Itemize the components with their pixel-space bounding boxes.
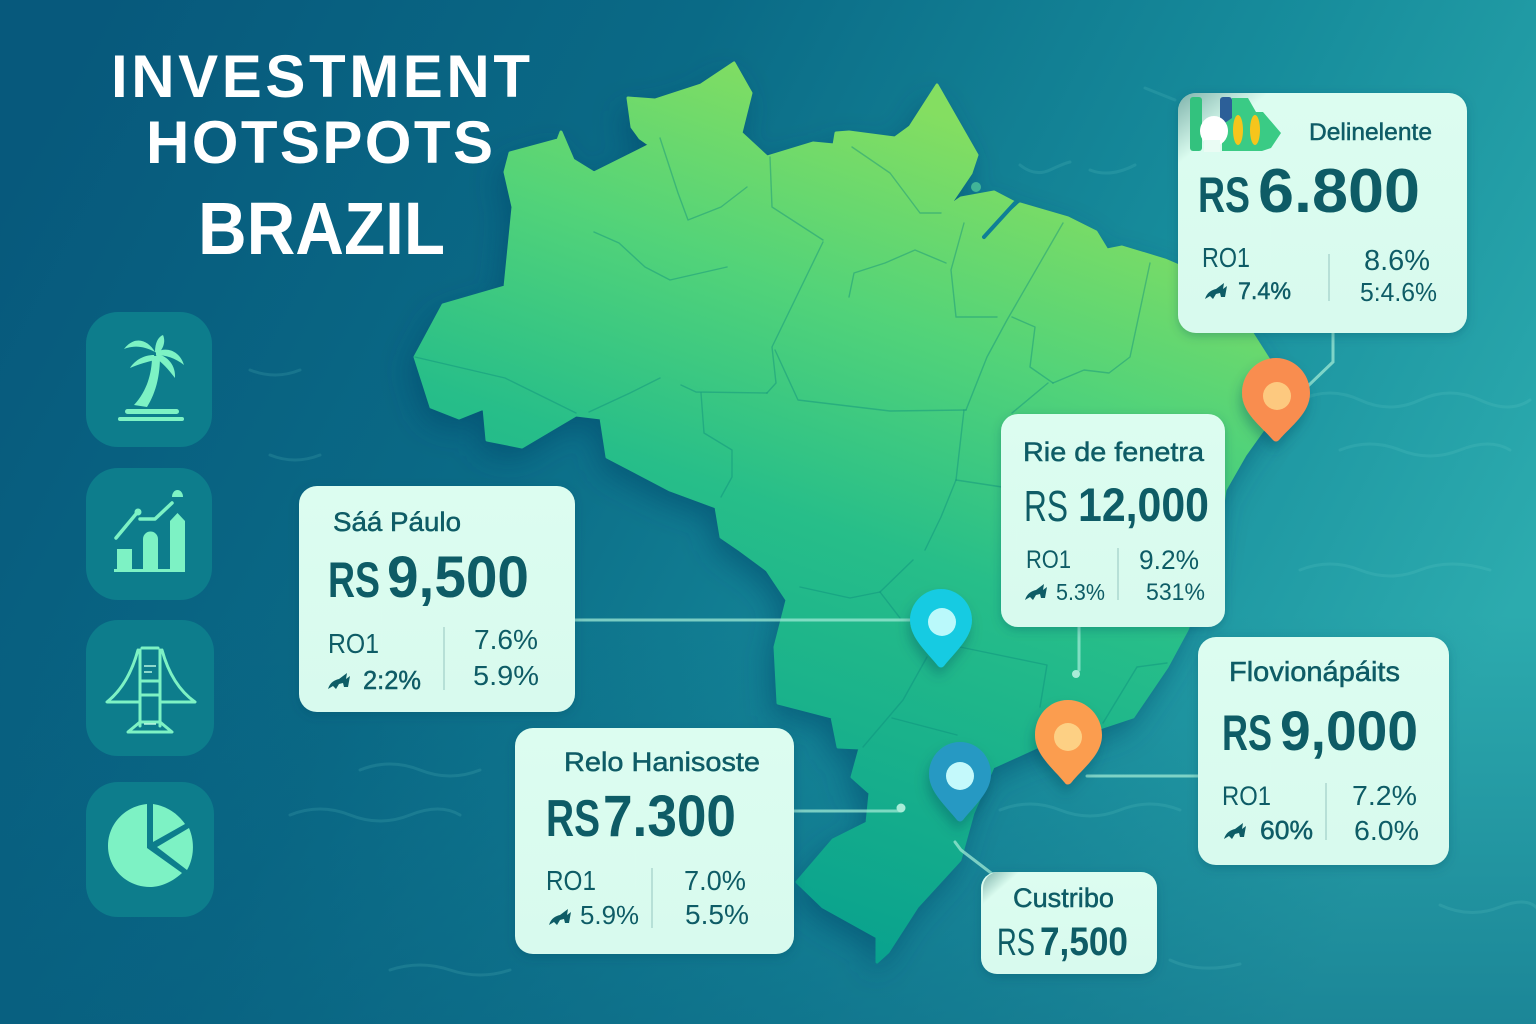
card: Delinelente [1178, 93, 1467, 333]
card: Flovionápáits: RS [1222, 705, 1272, 761]
card: Flovionápáits: 9,000 [1280, 699, 1418, 762]
card: Sáá Páulo: 7.6% [474, 624, 538, 655]
water wave decorations [250, 88, 1536, 975]
card: Sáá Páulo: RS [328, 552, 380, 608]
card: Rie de fenetra: RS [1024, 482, 1068, 531]
title: BRAZIL [198, 187, 445, 270]
card: Delinelente: 7.4% [1238, 278, 1291, 305]
icon: palm tree [86, 312, 212, 447]
card: Rie de fenetra: 531% [1146, 579, 1205, 606]
card: Rie de fenetra: RO1 [1026, 546, 1071, 574]
card: Rie de fenetra: 9.2% [1139, 545, 1199, 575]
pin: orange south-east [1035, 700, 1102, 784]
card: Sáá Páulo: 5.9% [473, 660, 539, 691]
card: Flovionápáits: Flovionápáits [1229, 656, 1400, 687]
card: Delinelente: RO1 [1202, 242, 1250, 273]
card: Relo Hanisoste [515, 728, 794, 954]
card: Relo Hanisoste: 5.5% [685, 899, 749, 930]
card: Delinelente: 5:4.6% [1360, 277, 1437, 307]
map of Brazil [415, 63, 1285, 962]
card: Sáá Páulo: Sáá Páulo [333, 507, 461, 537]
icon: rising bar chart [86, 468, 212, 600]
card: Flovionápáits: 7.2% [1352, 780, 1417, 811]
card: Sáá Páulo: 2:2% [363, 665, 421, 695]
card: Flovionápáits: 60% [1260, 815, 1313, 845]
card: Delinelente: Delinelente [1309, 119, 1432, 146]
card: Sáá Páulo: 9,500 [387, 545, 529, 610]
card: Delinelente: 6.800 [1258, 157, 1420, 226]
card: Custribo: RS [997, 922, 1035, 964]
icon: pie chart [86, 782, 214, 917]
title: HOTSPOTS [146, 109, 493, 176]
card: Flovionápáits: 6.0% [1354, 815, 1419, 846]
map shadow [409, 75, 1279, 974]
state borders [415, 138, 1167, 747]
card: Delinelente: RS [1198, 167, 1250, 223]
card: Custribo: Custribo [1013, 883, 1114, 913]
card: Custribo [981, 872, 1157, 974]
card: Flovionápáits [1198, 637, 1449, 865]
card: Custribo: 7,500 [1040, 920, 1128, 964]
card: Relo Hanisoste: 5.9% [580, 900, 639, 930]
card: Rie de fenetra: Rie de fenetra [1023, 437, 1205, 467]
icon: bridge tower [86, 620, 214, 756]
card: Delinelente: 8.6% [1364, 245, 1430, 277]
card: Sáá Páulo [299, 486, 575, 712]
title: INVESTMENT [111, 43, 530, 110]
card logo [1190, 97, 1281, 152]
card: Flovionápáits: RO1 [1222, 781, 1271, 811]
card: Rie de fenetra: 12,000 [1078, 478, 1209, 531]
leader lines [575, 333, 1333, 876]
card: Rie de fenetra: 5.3% [1056, 579, 1105, 605]
card: Sáá Páulo: RO1 [328, 628, 379, 659]
card: Relo Hanisoste: Relo Hanisoste [564, 747, 760, 777]
card: Relo Hanisoste: RO1 [546, 865, 596, 896]
card: Relo Hanisoste: 7.300 [603, 784, 736, 849]
title [111, 43, 530, 270]
pin: blue [929, 742, 991, 822]
pin: cyan [910, 589, 972, 668]
card: Relo Hanisoste: RS [546, 790, 600, 848]
pin: orange north-east [1242, 358, 1310, 442]
card: Relo Hanisoste: 7.0% [684, 865, 746, 896]
card: Rie de fenetra [1001, 414, 1225, 627]
